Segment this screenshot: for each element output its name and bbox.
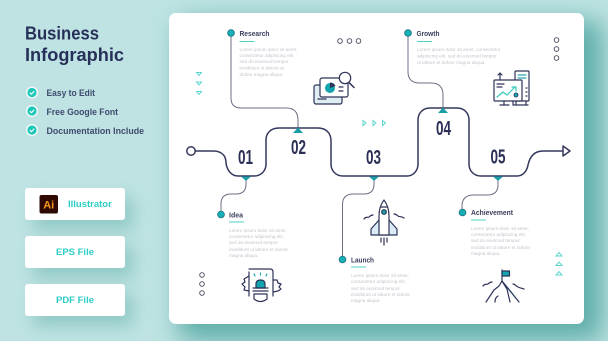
step numbers	[238, 118, 506, 169]
check item: Free Google Font: Free Google Font	[46, 107, 119, 118]
icon: charts with magnifier	[314, 72, 354, 104]
step: Research: Lorem ipsum dolor sit amet,	[240, 47, 297, 52]
icon: Adobe Illustrator: Ai	[43, 200, 54, 212]
step: Launch: incididunt ut labore et dolore	[351, 292, 410, 297]
decoration: right triangles	[556, 252, 562, 275]
decoration: top dots	[338, 39, 361, 43]
title: Infographic	[25, 45, 124, 65]
step: Idea: Idea	[229, 210, 244, 220]
decoration: right dots	[554, 38, 559, 60]
step: Idea: consectetur adipiscing elit,	[229, 234, 284, 239]
step: Launch: Launch	[351, 256, 374, 264]
step: Idea: magna aliqua.	[229, 253, 258, 258]
step: Research: Research	[240, 29, 270, 38]
step numbers: 03	[366, 147, 381, 169]
step numbers: 05	[490, 146, 506, 168]
step: Growth: ut labore et dolore magna aliqua.	[417, 60, 486, 65]
icon: mountain flag	[483, 270, 524, 302]
icon: Adobe Illustrator	[40, 195, 58, 214]
step: Achievement: sed do eiusmod tempor	[471, 238, 520, 243]
step: Launch: consectetur adipiscing elit,	[351, 279, 406, 284]
step: Idea	[218, 210, 288, 258]
decoration: left triangles	[196, 72, 202, 94]
step: Research: sed do eiusmod tempor	[240, 59, 289, 64]
step numbers: 01	[238, 147, 253, 169]
step: Launch: magna aliqua.	[351, 298, 380, 303]
step: Achievement: consectetur adipiscing elit,	[471, 232, 526, 237]
check item: Easy to Edit: Easy to Edit	[46, 88, 96, 99]
step: Idea: incididunt ut labore et dolore	[229, 247, 288, 252]
step: Achievement	[459, 208, 530, 256]
step: Achievement: Achievement	[471, 208, 514, 217]
button: EPS File: EPS File	[56, 247, 94, 258]
step: Launch: Lorem ipsum dolor sit amet,	[351, 273, 409, 278]
icon: growth computer	[494, 71, 529, 105]
step: Achievement: incididunt ut labore et dolore	[471, 245, 530, 250]
icon: rocket	[364, 200, 404, 245]
timeline step markers	[241, 108, 503, 181]
step: Idea: sed do eiusmod tempor	[229, 240, 278, 245]
step: Research: dolore magna aliqua.	[240, 72, 283, 77]
button: Illustrator	[25, 188, 125, 220]
step: Launch	[339, 256, 410, 303]
step: Growth: adipiscing elit, sed do eiusmod tempor	[417, 54, 497, 58]
decoration: centre triangles	[363, 120, 386, 126]
step numbers: 04	[436, 118, 452, 140]
step: Growth: Growth	[416, 29, 440, 38]
step numbers: 02	[291, 137, 306, 159]
button: EPS File	[25, 236, 125, 268]
feature checklist	[26, 86, 144, 137]
step: Idea: Lorem ipsum dolor sit amet,	[229, 228, 287, 233]
button: PDF File: PDF File	[56, 295, 94, 306]
decoration: lower left dots	[200, 273, 204, 295]
step: Achievement: Lorem ipsum dolor sit amet,	[471, 226, 529, 231]
check item: Documentation Include: Documentation Include	[46, 126, 144, 137]
step: Research: consectetur adipiscing elit,	[240, 53, 294, 58]
step: Research: incididunt ut labore et	[240, 66, 285, 70]
title: Business	[25, 24, 99, 44]
step: Achievement: magna aliqua.	[471, 251, 500, 256]
button: Illustrator: Illustrator	[68, 199, 112, 210]
step: Growth: Lorem ipsum dolor sit amet, consectetur	[417, 47, 501, 52]
connector lines	[221, 36, 498, 257]
step: Launch: sed do eiusmod tempor	[351, 286, 400, 291]
button: PDF File	[25, 284, 125, 316]
icon: idea alarm	[242, 269, 281, 302]
step: Growth	[405, 29, 501, 65]
title	[25, 24, 124, 65]
timeline path with arrow	[187, 108, 570, 176]
panel: main card	[169, 13, 584, 324]
step: Research	[228, 29, 297, 77]
